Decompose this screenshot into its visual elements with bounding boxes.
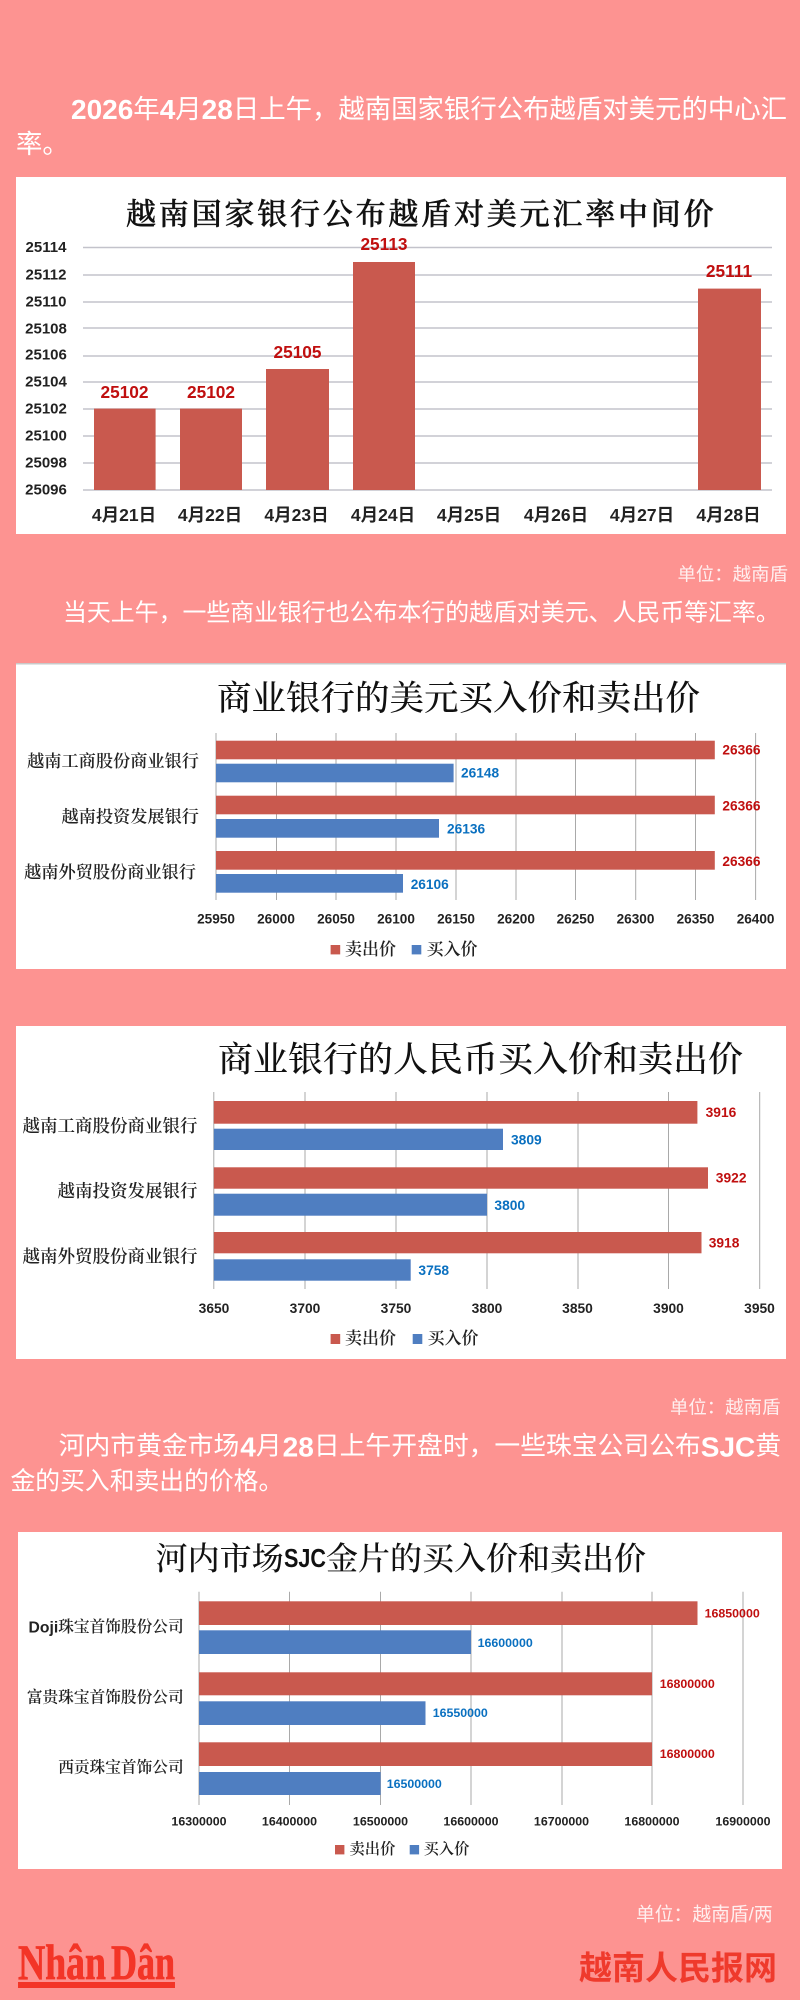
value labels: 16550000 <box>433 1706 488 1720</box>
x axis labels <box>197 912 775 926</box>
intro paragraph: central bank rate: 2026年4月28日上午，越南国家银行公布越盾对美元的中心汇 <box>71 94 787 124</box>
grid lines <box>199 1592 743 1805</box>
x axis date labels: 4月22日 <box>178 505 242 525</box>
y axis labels and grid lines: 25098 <box>25 454 67 472</box>
x axis labels: 26350 <box>677 912 714 926</box>
x axis date labels <box>92 505 761 525</box>
bank labels: 越南投资发展银行 <box>58 1181 198 1201</box>
bars <box>214 1101 708 1281</box>
x axis labels <box>171 1815 771 1829</box>
y axis labels and grid lines: 25104 <box>25 374 68 390</box>
x axis date labels: 4月25日 <box>437 505 501 525</box>
x axis labels: 16400000 <box>262 1815 317 1829</box>
y axis labels and grid lines: 25100 <box>25 428 67 444</box>
x axis labels: 16700000 <box>534 1815 589 1829</box>
x axis labels: 26000 <box>257 912 295 926</box>
logo: Nhan Dan: Nhân <box>18 1934 106 1990</box>
x axis date labels: 4月26日 <box>524 505 588 525</box>
legend <box>331 940 478 959</box>
paragraph: Hanoi gold market <box>10 1431 781 1496</box>
x axis labels: 16300000 <box>171 1815 227 1829</box>
y axis labels and grid lines: 25114 <box>26 239 67 256</box>
value labels: 26366 <box>722 742 761 758</box>
x axis labels: 3700 <box>290 1301 321 1316</box>
panel: commercial bank RMB bar chart <box>16 1026 786 1359</box>
y axis labels and grid lines <box>25 239 772 498</box>
value labels: 26366 <box>722 854 761 869</box>
value labels: 26106 <box>411 877 449 892</box>
chart title: 河内市场 <box>156 1540 284 1576</box>
value labels: 26366 <box>722 798 761 814</box>
x axis date labels: 4月24日 <box>351 505 415 525</box>
grid lines <box>214 1092 760 1289</box>
chart title <box>156 1540 646 1576</box>
unit note: 单位：越南盾/两 <box>636 1904 773 1924</box>
legend: 卖出价 <box>345 940 396 959</box>
bar value labels: 25111 <box>706 261 752 281</box>
legend: 买入价 <box>428 1329 478 1348</box>
x axis date labels: 4月28日 <box>696 505 761 525</box>
legend: 买入价 <box>426 940 478 959</box>
chart title: 商业银行的美元买入价和卖出价 <box>217 680 700 718</box>
value labels: 16800000 <box>660 1677 715 1691</box>
bar value labels <box>100 234 752 402</box>
bars <box>94 262 761 490</box>
bar value labels: 25113 <box>360 234 408 254</box>
bank labels: 越南工商股份商业银行 <box>22 1116 198 1136</box>
x axis labels: 3850 <box>562 1301 593 1316</box>
company labels: Doji珠宝首饰股份公司 <box>29 1617 184 1636</box>
value labels: 3758 <box>418 1263 449 1278</box>
bank labels <box>24 752 199 882</box>
y axis labels and grid lines: 25112 <box>26 266 66 284</box>
legend: 买入价 <box>424 1841 470 1858</box>
bank labels <box>22 1116 198 1267</box>
value labels: 3916 <box>706 1105 737 1120</box>
x axis labels: 26050 <box>317 912 355 926</box>
company labels: 西贡珠宝首饰公司 <box>58 1758 184 1776</box>
unit note: 单位：越南盾 <box>670 1396 780 1418</box>
bar value labels: 25102 <box>187 382 235 402</box>
x axis labels: 26400 <box>737 912 775 926</box>
legend <box>335 1840 470 1858</box>
x axis labels: 26150 <box>437 912 475 926</box>
intro paragraph: central bank rate <box>16 94 787 159</box>
x axis labels: 26250 <box>557 912 594 926</box>
y axis labels and grid lines: 25096 <box>25 482 67 498</box>
x axis labels: 3900 <box>653 1301 684 1316</box>
x axis labels: 26200 <box>497 912 535 926</box>
legend: 卖出价 <box>345 1329 396 1348</box>
bar value labels: 25102 <box>100 382 149 402</box>
chart title: 金片的买入价和卖出价 <box>326 1540 646 1576</box>
bank labels: 越南外贸股份商业银行 <box>24 863 196 882</box>
value labels <box>418 1105 747 1278</box>
brand name: 越南人民报网 <box>579 1950 777 1986</box>
x axis labels: 3950 <box>744 1301 775 1316</box>
value labels: 26136 <box>447 822 485 836</box>
x axis labels: 16500000 <box>353 1815 408 1829</box>
legend: 卖出价 <box>350 1840 396 1858</box>
y axis labels and grid lines: 25110 <box>26 294 66 310</box>
intro paragraph: central bank rate: 率。 <box>16 129 69 159</box>
x axis date labels: 4月23日 <box>264 505 329 525</box>
panel: central bank USD mid-rate column chart <box>16 177 786 534</box>
paragraph: Hanoi gold market: 河内市黄金市场4月28日上午开盘时，一些珠宝公司公布SJC黄 <box>59 1431 781 1462</box>
company labels <box>27 1617 184 1776</box>
chart title: 商业银行的人民币买入价和卖出价 <box>218 1040 743 1080</box>
y axis labels and grid lines: 25108 <box>25 320 67 338</box>
x axis labels: 26100 <box>377 912 415 926</box>
bar value labels: 25105 <box>273 342 322 362</box>
x axis labels: 26300 <box>617 912 654 926</box>
x axis labels: 16800000 <box>624 1815 680 1829</box>
x axis date labels: 4月27日 <box>610 505 674 525</box>
chart title: SJC <box>284 1543 326 1573</box>
value labels: 3922 <box>716 1170 747 1186</box>
bank labels: 越南外贸股份商业银行 <box>22 1247 198 1267</box>
paragraph: commercial banks: 当天上午，一些商业银行也公布本行的越盾对美元、人民币等汇率。 <box>63 600 780 626</box>
panel: SJC gold bar chart <box>18 1532 782 1869</box>
logo: Nhan Dan: Dân <box>111 1934 175 1990</box>
y axis labels and grid lines: 25106 <box>25 346 67 364</box>
bank labels: 越南投资发展银行 <box>61 808 199 826</box>
x axis labels: 16900000 <box>715 1815 771 1829</box>
value labels: 26148 <box>461 766 499 780</box>
x axis labels: 3750 <box>381 1301 412 1316</box>
x axis labels: 25950 <box>197 912 235 926</box>
value labels: 16850000 <box>705 1607 760 1621</box>
bars <box>216 741 715 893</box>
x axis labels: 16600000 <box>443 1815 499 1829</box>
x axis labels: 3800 <box>472 1301 503 1316</box>
bars <box>199 1601 698 1795</box>
unit note: 单位：越南盾 <box>678 564 788 584</box>
value labels: 3809 <box>511 1132 542 1148</box>
value labels <box>387 1607 760 1791</box>
value labels: 16600000 <box>478 1636 533 1650</box>
value labels: 16500000 <box>387 1777 442 1791</box>
value labels <box>411 742 761 892</box>
paragraph: Hanoi gold market: 金的买入和卖出的价格。 <box>10 1468 283 1496</box>
x axis date labels: 4月21日 <box>92 505 156 525</box>
chart title: 越南国家银行公布越盾对美元汇率中间价 <box>126 198 716 232</box>
grid lines <box>216 733 756 900</box>
value labels: 3800 <box>494 1198 525 1213</box>
panel: commercial bank USD bar chart <box>16 663 786 969</box>
company labels: 富贵珠宝首饰股份公司 <box>27 1688 184 1706</box>
y axis labels and grid lines: 25102 <box>25 400 67 418</box>
legend <box>331 1329 478 1348</box>
bank labels: 越南工商股份商业银行 <box>27 752 199 771</box>
value labels: 16800000 <box>660 1747 715 1761</box>
x axis labels <box>199 1301 775 1316</box>
value labels: 3918 <box>709 1236 740 1250</box>
x axis labels: 3650 <box>199 1301 230 1316</box>
